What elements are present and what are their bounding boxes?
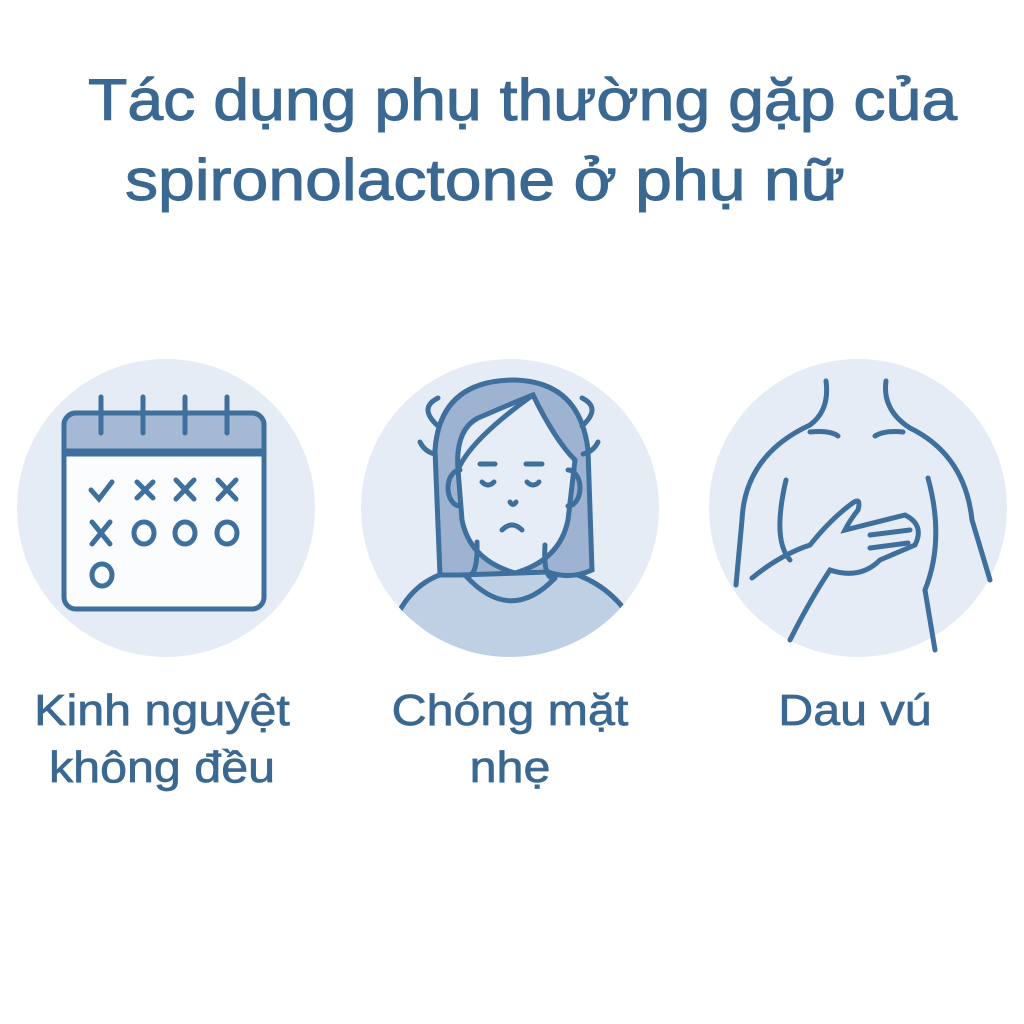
label: irregular periods: Kinh nguyệt [34,686,290,735]
title: Tác dụng phụ thường gặp của [88,68,957,133]
label: irregular periods: không đều [49,743,275,792]
icons [17,359,1007,657]
label: dizziness [392,686,628,792]
label: dizziness: Chóng mặt [392,686,628,735]
icon: dizzy woman [361,359,659,657]
title: spironolactone ở phụ nữ [125,148,845,213]
icon: calendar [17,359,315,657]
label: dizziness: nhẹ [470,743,550,792]
icon: chest pain [709,359,1007,657]
title [88,68,958,213]
label: breast pain: Dau vú [778,686,932,735]
label: irregular periods [34,686,290,792]
